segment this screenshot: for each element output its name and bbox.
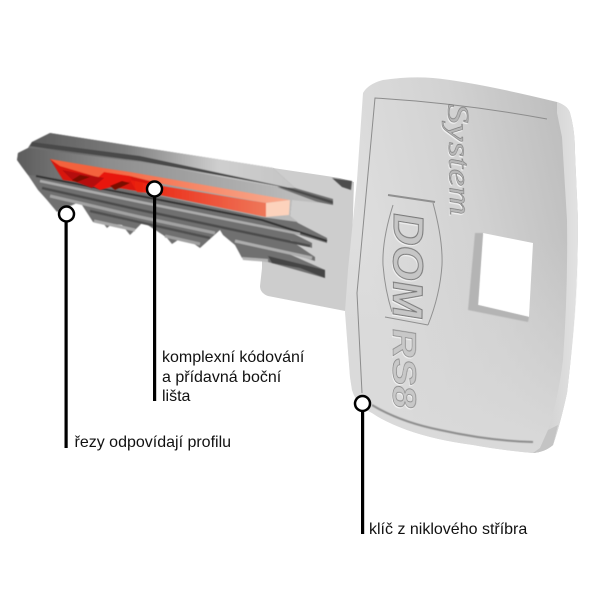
head right rim <box>533 102 578 453</box>
embossed DOM text: DOM <box>384 210 432 323</box>
DOM logo frame <box>383 195 442 325</box>
head body <box>345 77 578 453</box>
blade face above bar <box>17 148 320 222</box>
embossed RS8 text: RS8 <box>385 326 422 412</box>
lower light tip <box>242 257 268 262</box>
square hole bevel <box>468 233 529 322</box>
inner outline <box>357 98 547 393</box>
lower stripes <box>36 176 327 241</box>
red side bar <box>50 159 290 217</box>
callout: complex coding: lišta <box>162 388 191 405</box>
callout: profile cuts <box>59 206 231 451</box>
embossed System text: System <box>441 103 478 216</box>
blade silhouette with teeth <box>17 133 333 278</box>
key head <box>345 77 578 453</box>
callout: profile cuts: řezy odpovídají profilu <box>74 434 231 451</box>
callout: complex coding <box>147 182 305 405</box>
callout: nickel silver <box>355 396 527 538</box>
bottom groove <box>372 405 533 442</box>
blade top ridge <box>28 133 295 188</box>
callout: nickel silver: klíč z niklového stříbra <box>369 521 527 538</box>
callout: complex coding: komplexní kódování <box>162 349 305 366</box>
lower dark wedge <box>268 256 325 278</box>
key blade shoulder <box>260 168 354 312</box>
callout: complex coding: a přídavná boční <box>162 369 282 386</box>
key blade <box>17 133 333 278</box>
head lower highlight <box>345 233 578 453</box>
